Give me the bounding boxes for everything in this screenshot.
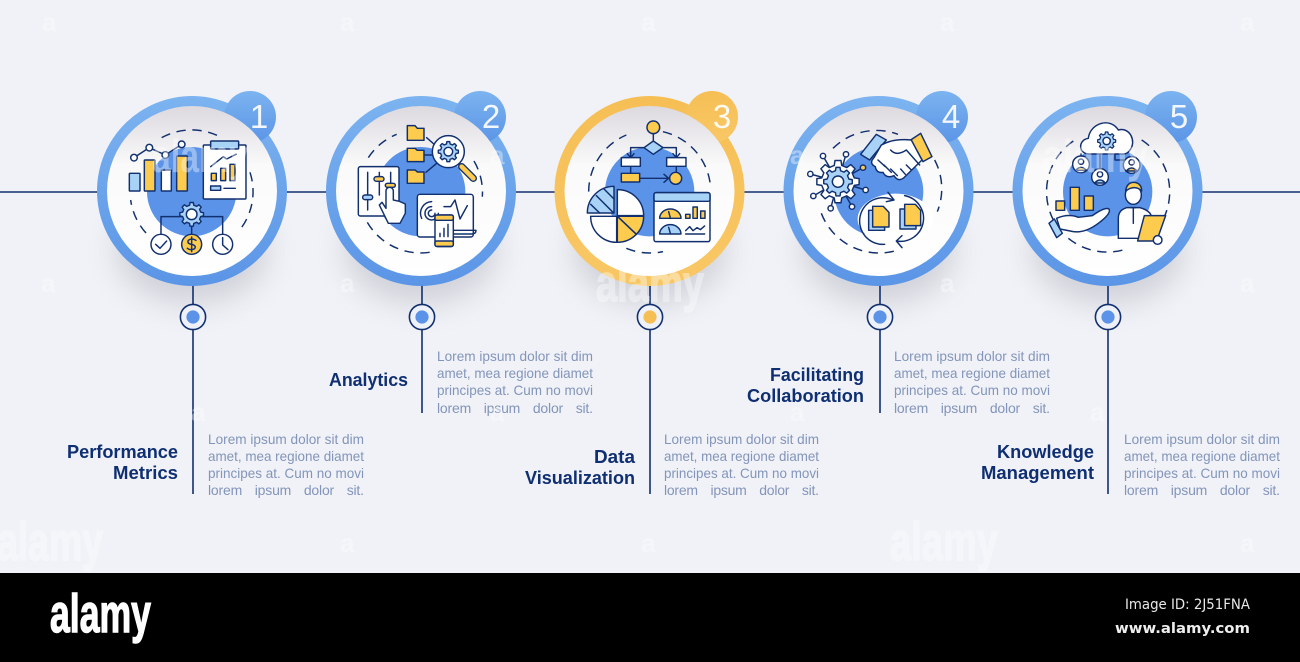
heading 3: Data [594, 446, 636, 467]
text block 1 [208, 431, 364, 498]
text block 3: amet, mea regione diamet [664, 448, 819, 464]
text block 2: lorem ipsum dolor sit. [437, 400, 593, 416]
node 3 [637, 304, 663, 330]
number 4: 4 [942, 98, 960, 135]
text block 2: Lorem ipsum dolor sit dim [437, 348, 593, 364]
text block 4: Lorem ipsum dolor sit dim [894, 348, 1050, 364]
heading 1: Performance [67, 441, 178, 462]
watermarks: alamy [0, 512, 103, 572]
icon: metrics [129, 130, 253, 254]
text block 1: amet, mea regione diamet [208, 448, 364, 464]
text block 3: principes at. Cum no movi [664, 465, 819, 481]
text block 5: principes at. Cum no movi [1124, 465, 1280, 481]
footer bar [0, 573, 1300, 662]
watermarks: a [340, 7, 355, 37]
step 2: analytics [326, 91, 593, 416]
watermarks: alamy [1042, 130, 1148, 182]
text block 4: lorem ipsum dolor sit. [894, 400, 1050, 416]
number 5: 5 [1170, 98, 1188, 135]
text block 2: principes at. Cum no movi [437, 382, 593, 398]
ring 1 [97, 91, 287, 286]
watermarks: a [191, 397, 206, 427]
text block 3: lorem ipsum dolor sit. [664, 482, 819, 498]
watermarks: a [641, 528, 656, 558]
alamy logo: alamy [50, 584, 151, 644]
text block 5: Lorem ipsum dolor sit dim [1124, 431, 1280, 447]
watermarks: alamy [152, 130, 248, 182]
icon: data visualization [587, 121, 711, 253]
watermarks: a [1240, 268, 1255, 298]
heading 4: Facilitating [770, 364, 864, 385]
heading 5 [981, 441, 1094, 483]
watermarks: a [1090, 397, 1105, 427]
watermarks: a [340, 528, 355, 558]
text block 3: Lorem ipsum dolor sit dim [664, 431, 819, 447]
heading 3: Visualization [525, 467, 635, 488]
heading 4 [747, 364, 864, 406]
heading 5: Management [981, 462, 1094, 483]
watermarks: a [42, 7, 57, 37]
watermarks: alamy [596, 255, 704, 313]
node 2 [409, 304, 435, 330]
watermarks: a [41, 268, 56, 298]
heading 4: Collaboration [747, 385, 864, 406]
ring 5 [1012, 91, 1202, 286]
watermarks: a [1240, 7, 1255, 37]
icon: analytics [358, 126, 482, 253]
node 4 [867, 304, 893, 330]
icon: collaboration [808, 130, 942, 253]
watermarks: a [340, 268, 355, 298]
text block 3 [664, 431, 819, 498]
text block 5 [1124, 431, 1280, 498]
heading 5: Knowledge [997, 441, 1094, 462]
step 5: knowledge management [981, 91, 1280, 498]
step 3: data visualization [525, 91, 819, 498]
ring 3 [554, 91, 744, 286]
text block 2: amet, mea regione diamet [437, 365, 593, 381]
watermarks: a [940, 7, 955, 37]
text block 4: principes at. Cum no movi [894, 382, 1050, 398]
watermarks: a [790, 140, 805, 170]
watermarks: a [790, 397, 805, 427]
heading 1: Metrics [113, 462, 178, 483]
text block 5: lorem ipsum dolor sit. [1124, 482, 1280, 498]
watermarks: a [641, 7, 656, 37]
watermarks: alamy [890, 512, 998, 572]
text block 4 [894, 348, 1050, 416]
ring 2 [326, 91, 516, 286]
website: www.alamy.com [1115, 621, 1250, 637]
heading 3 [525, 446, 636, 488]
number 2: 2 [482, 98, 500, 135]
text block 5: amet, mea regione diamet [1124, 448, 1280, 464]
node 1 [180, 304, 206, 330]
text block 2 [437, 348, 593, 416]
image id: Image ID: 2J51FNA [1125, 597, 1250, 613]
text block 1: Lorem ipsum dolor sit dim [208, 431, 364, 447]
icon: knowledge [1047, 123, 1170, 252]
ring 4 [784, 91, 974, 286]
watermarks: a [1240, 528, 1255, 558]
step 1: performance metrics [67, 91, 364, 498]
text block 4: amet, mea regione diamet [894, 365, 1050, 381]
number 3: 3 [713, 98, 731, 135]
heading 1 [67, 441, 178, 483]
node 5 [1095, 304, 1121, 330]
watermarks: a [490, 140, 505, 170]
text block 1: principes at. Cum no movi [208, 465, 364, 481]
horizontal timeline [0, 191, 1300, 193]
number 1: 1 [250, 98, 268, 135]
watermarks: a [940, 268, 955, 298]
text block 1: lorem ipsum dolor sit. [208, 482, 364, 498]
heading 2: Analytics [329, 369, 408, 390]
step 4: facilitating collaboration [747, 91, 1050, 416]
watermarks: a [490, 397, 505, 427]
